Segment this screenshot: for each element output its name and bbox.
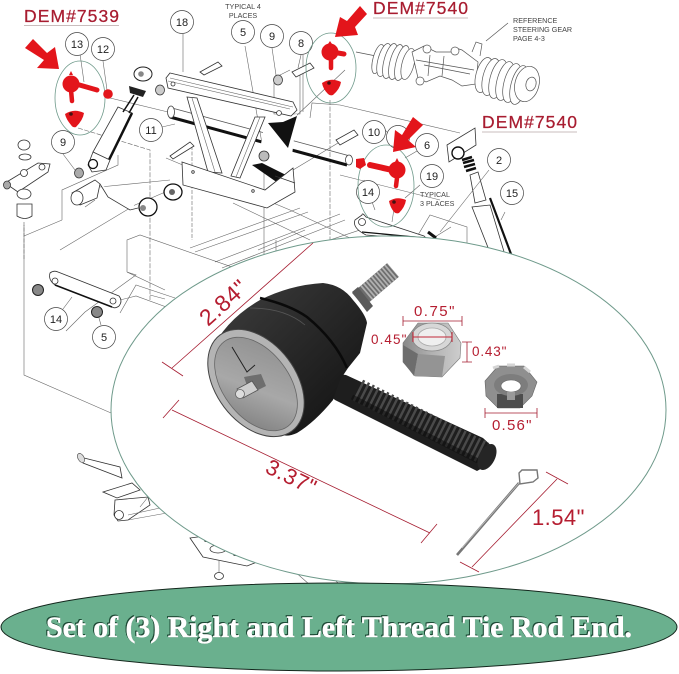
- lower frame rails: [127, 208, 350, 299]
- red tie rod end: [370, 158, 406, 186]
- callout numbers: 11: [145, 125, 157, 137]
- housing seam: [260, 298, 347, 368]
- dimension: 2.84 inch: [162, 243, 313, 376]
- callout numbers: 5: [101, 332, 107, 344]
- lower link arm: [32, 271, 121, 325]
- red arrow, left: [25, 39, 59, 69]
- dimension: 0.45 inch: [371, 332, 452, 347]
- upper threaded stud: [352, 270, 393, 312]
- callout numbers: 18: [176, 17, 188, 29]
- red arrow, right: [393, 117, 423, 152]
- dimension: 1.54 inch: [460, 472, 585, 572]
- callout numbers: 15: [506, 188, 518, 200]
- banner: [1, 583, 677, 671]
- product: castle nut: [485, 365, 537, 408]
- grease fitting: [236, 374, 266, 398]
- note: typical 4 places: PLACES: [229, 11, 257, 20]
- callout numbers: 9: [60, 137, 66, 149]
- shock absorber, left: [74, 67, 152, 178]
- note: reference steering gear: STEERING GEAR: [513, 25, 572, 34]
- note: typical 3 places: TYPICAL: [420, 190, 450, 199]
- callout numbers: 12: [97, 44, 109, 56]
- red arrow, top: [335, 6, 367, 37]
- callout numbers: 14: [362, 187, 374, 199]
- front axle parts: [76, 452, 365, 585]
- part number DEM#7539: DEM#7539: [24, 6, 119, 26]
- callout numbers: 5: [240, 27, 246, 39]
- highlighted part group 6 and 19: [356, 145, 414, 227]
- crossmember bracket: [156, 62, 358, 208]
- dimension: 0.75 inch: [403, 303, 462, 326]
- cross tube: [168, 106, 352, 165]
- left pivot hardware: [4, 140, 182, 260]
- callout numbers: 6: [424, 140, 430, 152]
- product panel: large white ellipse: [111, 236, 666, 584]
- green ring: [306, 33, 356, 103]
- dimension: 0.75 inch: 0.75": [414, 303, 455, 320]
- product: hex nut: [403, 323, 461, 377]
- dimension: 3.37 inch: [163, 400, 437, 543]
- red nuts: [65, 89, 113, 127]
- red nuts: [356, 158, 406, 213]
- dimension: 3.37 inch: 3.37": [262, 454, 321, 500]
- dimension: 0.56 inch: [485, 408, 537, 434]
- highlighted part group, steering side: [306, 33, 356, 103]
- callout numbers: 8: [298, 38, 304, 50]
- grey face: [198, 322, 314, 446]
- dimension: 0.45 inch: 0.45": [371, 332, 407, 347]
- threaded shank: [327, 373, 500, 473]
- callout numbers: 13: [71, 39, 83, 51]
- silver face rim: [188, 311, 324, 455]
- green ring: [358, 145, 414, 227]
- highlighted part group 13 and 12: [55, 61, 113, 135]
- steering gear assembly: [356, 23, 543, 106]
- red tie rod end: [322, 41, 344, 68]
- dimension: 0.43 inch: [462, 342, 507, 362]
- green ring: [55, 61, 105, 135]
- dimension: 0.56 inch: 0.56": [492, 417, 532, 434]
- banner ellipse: [1, 583, 677, 671]
- note: typical 3 places: 3 PLACES: [420, 199, 455, 208]
- dimension: 1.54 inch: 1.54": [532, 505, 585, 530]
- callout numbers: [44, 10, 524, 348]
- v mark: [232, 347, 255, 372]
- callout numbers: 9: [269, 31, 275, 43]
- callout numbers: 19: [426, 171, 438, 183]
- callout numbers: 2: [496, 155, 502, 167]
- callout numbers: 14: [50, 314, 62, 326]
- callout numbers: 10: [368, 127, 380, 139]
- product: cotter pin: [457, 470, 538, 555]
- banner title: Set of (3) Right and Left Thread Tie Rod End.: [46, 611, 632, 644]
- part number DEM#7540 right: DEM#7540: [482, 112, 577, 132]
- note: reference steering gear: REFERENCE: [513, 16, 557, 25]
- right rod end and shock: [354, 128, 511, 255]
- background exploded parts diagram: [4, 2, 572, 585]
- red tie rod end: [62, 71, 97, 101]
- product: tie rod end: [188, 270, 500, 473]
- red nut: [322, 80, 341, 95]
- black housing: [210, 283, 367, 436]
- dimension: 0.43 inch: 0.43": [472, 344, 507, 359]
- dimension: 2.84 inch: 2.84": [194, 274, 253, 331]
- note: typical 4 places: TYPICAL 4: [225, 2, 261, 11]
- note: reference steering gear: PAGE 4-3: [513, 34, 545, 43]
- assembly guide lines: [24, 46, 467, 413]
